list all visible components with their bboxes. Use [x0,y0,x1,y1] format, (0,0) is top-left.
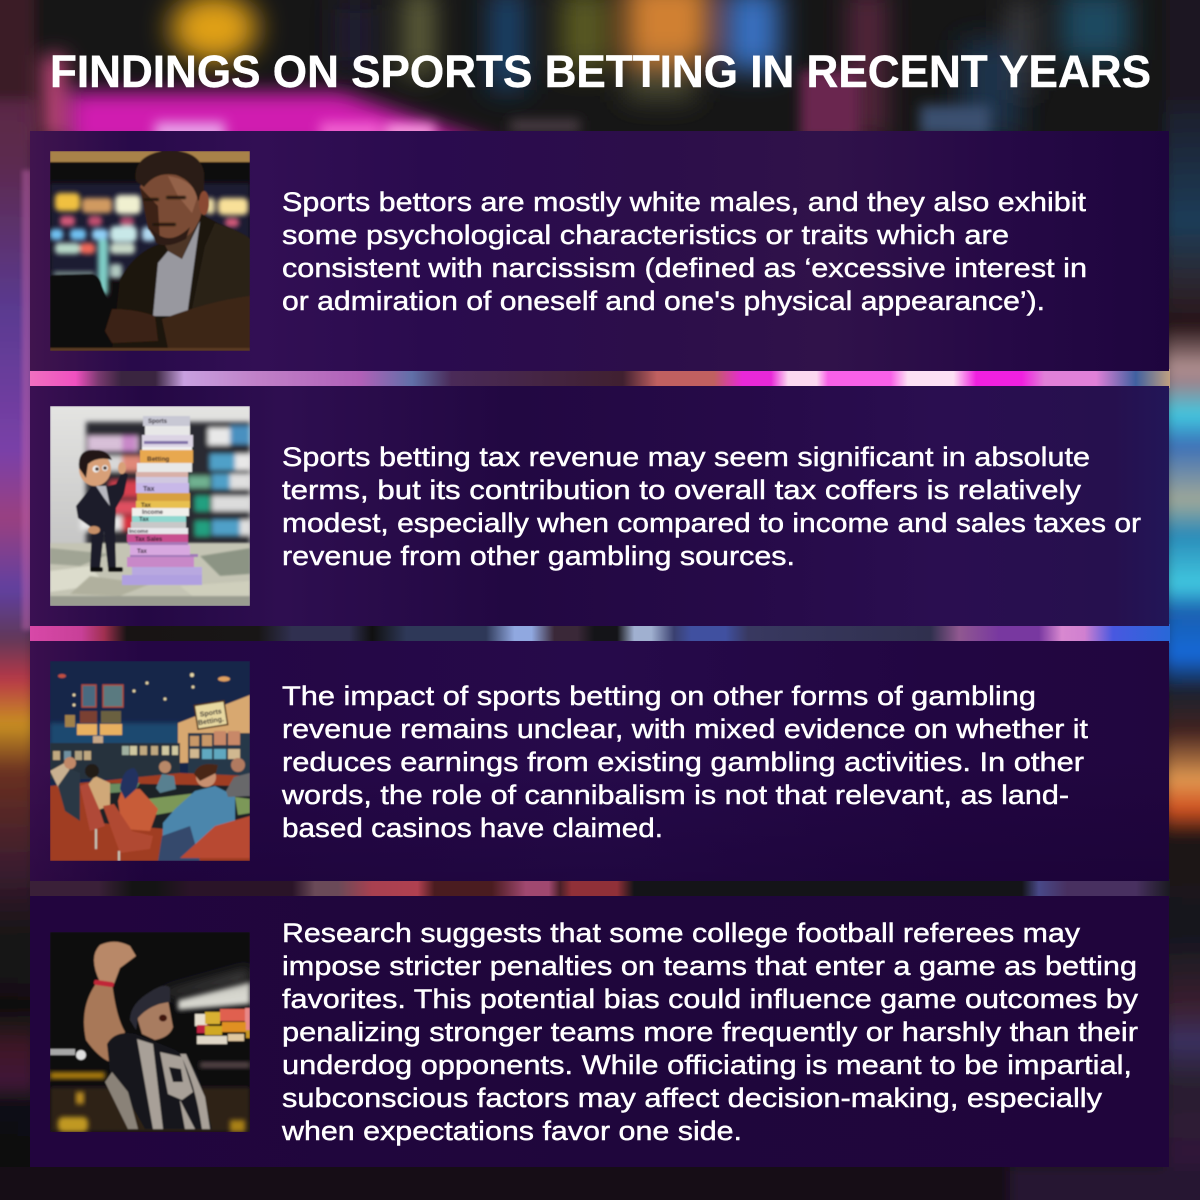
gaming tables [100,783,250,829]
photo: figure beside a stack of tax books [50,406,250,606]
stack of books: Tax [139,517,150,523]
referee [84,942,212,1129]
text: other gambling revenue [281,681,1089,843]
text: referee bias: when expectations favor one side. [281,1116,742,1146]
text: bettors profile: Sports bettors are mostly white males, and they also exhibit [282,187,1087,217]
text: tax revenue: terms, but its contribution to overall tax coffers is relatively [282,475,1082,505]
text: tax revenue: modest, especially when compared to income and sales taxes or [282,508,1141,538]
photo: man looking at a tablet [50,151,250,351]
photo: illustrated casino floor [50,661,250,861]
text: other gambling revenue: revenue remains unclear, with mixed evidence on whether it [282,714,1089,744]
hanging scoreboards [64,683,125,744]
photo: football referee raising a fist [50,932,250,1132]
stack of books: Tax [143,486,155,493]
shirt [153,221,200,316]
text: referee bias: underdog opponents. While officiating is meant to be impartial, [282,1050,1132,1080]
text: other gambling revenue: based casinos have claimed. [282,813,663,843]
text: other gambling revenue: words, the role of cannibalism is not that relevant, as land- [281,780,1069,810]
panel: sports bettors profile [30,131,1169,371]
text: referee bias: subconscious factors may affect decision-making, especially [282,1083,1103,1113]
face [139,173,202,239]
lower sleeve [162,296,250,348]
cartoon businessman [76,450,128,572]
back wall with the sign [178,695,250,763]
text: referee bias: impose stricter penalties on teams that enter a game as betting [282,951,1137,981]
text: tax revenue: revenue from other gambling sources. [282,541,795,571]
text: referee bias: penalizing stronger teams more frequently or harshly than their [282,1017,1138,1047]
money on the floor [50,543,250,606]
photo: illustrated casino floor: Sports [199,708,222,719]
stadium lights and scoreboard [50,967,250,1132]
red chairs [80,783,250,861]
text: bettors profile: or admiration of oneself and one's physical appearance’). [282,286,1045,316]
panel: impact on other gambling revenue [30,641,1169,881]
photo: illustrated casino floor: Betting. [198,716,225,727]
panel: tax revenue [30,386,1169,626]
text: referee bias [281,918,1139,1146]
stack of books: Income [142,510,164,516]
stack of books: Betting [147,456,169,463]
stack of books: Tax [141,503,152,509]
neck [164,229,195,258]
text: bettors profile [282,187,1087,316]
title: FINDINGS ON SPORTS BETTING IN RECENT YEARS [50,46,1151,97]
stack of books: Sports [148,419,168,425]
jacket [112,214,238,347]
text: tax revenue: Sports betting tax revenue may seem significant in absolute [282,442,1090,472]
text: tax revenue [282,442,1141,571]
tablet [50,273,108,300]
red carpet [50,773,250,861]
panel: referee bias [30,896,1169,1167]
hand [105,309,158,343]
stack of books: Tax [137,549,148,555]
slot machines [50,731,250,783]
text: bettors profile: some psychological characteristics or traits which are [282,220,1009,250]
stack of books: Income [129,529,148,535]
text: referee bias: Research suggests that some college football referees may [282,918,1081,948]
text: other gambling revenue: The impact of sports betting on other forms of gambling [282,681,1036,711]
strips between the panels [30,369,1170,388]
hair [136,151,204,201]
text: bettors profile: consistent with narcissism (defined as ‘excessive interest in [282,253,1087,283]
seated people [50,757,250,861]
stack of books: Tax Sales [135,537,163,543]
text: other gambling revenue: reduces earnings from existing gambling activities. In other [282,747,1084,777]
text: referee bias: favorites. This potential bias could influence game outcomes by [282,984,1139,1014]
stack of books [122,416,202,585]
